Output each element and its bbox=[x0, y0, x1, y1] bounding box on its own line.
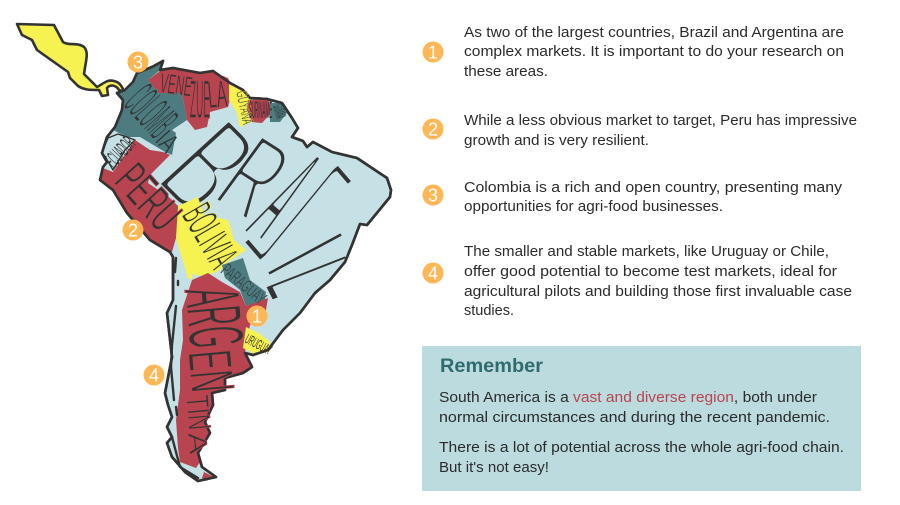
label: ARGENTINA: A bbox=[182, 431, 214, 456]
badge 1 on map bbox=[246, 306, 268, 326]
text 4: offer good potential to become test markets, ideal for bbox=[464, 264, 837, 280]
badge 3 on map bbox=[128, 52, 148, 72]
label: BRAZIL: Z bbox=[208, 134, 388, 292]
map of South America: ECUADOR bbox=[99, 131, 140, 172]
label: ARGENTINA: ARG bbox=[168, 284, 261, 351]
label: BRAZIL: B bbox=[129, 93, 287, 241]
region: Guyana bbox=[229, 84, 252, 127]
item 3 bbox=[422, 180, 843, 215]
region: Peru bbox=[101, 140, 178, 252]
region: Colombia bbox=[113, 62, 187, 155]
region: Central America bbox=[17, 24, 124, 96]
label: BRAZIL: I bbox=[237, 214, 371, 295]
badge 3 on map: 3 bbox=[133, 52, 143, 72]
region: French Guiana bbox=[270, 103, 287, 122]
badge 3 bbox=[422, 184, 444, 206]
text: not easy: But it's not easy! bbox=[439, 460, 549, 476]
text 3: Colombia is a rich and open country, presenting many bbox=[464, 180, 843, 196]
badge 2: 2 bbox=[428, 120, 438, 140]
map of South America: ZUE bbox=[190, 68, 210, 130]
text 4 bbox=[464, 244, 852, 319]
label: BRAZIL: L bbox=[238, 243, 380, 312]
text 3 bbox=[464, 180, 843, 215]
badge 2 bbox=[422, 118, 444, 140]
heading: Remember: Remember bbox=[440, 356, 544, 377]
text 1: these areas. bbox=[464, 64, 548, 80]
item 4 bbox=[422, 244, 852, 319]
label: COLOMBIA: IA bbox=[150, 124, 185, 159]
badge 2 on map bbox=[122, 220, 144, 240]
region: Uruguay bbox=[243, 327, 270, 353]
panel: Remember bbox=[422, 346, 861, 491]
label: COLOMBIA bbox=[113, 74, 188, 159]
map of South America: COLOMB bbox=[113, 74, 188, 149]
region: Argentina bbox=[176, 273, 268, 468]
item 2 bbox=[422, 113, 857, 149]
label: PERU: PERU bbox=[105, 154, 191, 241]
map of South America bbox=[17, 24, 391, 481]
map of South America: URUGUAY bbox=[243, 331, 275, 358]
text 1: As two of the largest countries, Brazil and Argentina are bbox=[464, 25, 844, 41]
label: VENEZUELA bbox=[158, 67, 229, 130]
text 3: opportunities for agri-food businesses. bbox=[464, 199, 723, 215]
region: Bolivia bbox=[176, 197, 246, 280]
badge 4 on map: 4 bbox=[149, 366, 159, 386]
map of South America: GUIANA bbox=[269, 103, 289, 121]
badge 4 bbox=[422, 262, 444, 284]
label: GUYANA: GUYANA bbox=[232, 89, 256, 126]
Chile inner line bbox=[171, 258, 198, 478]
region: continent base (Brazil) bbox=[100, 61, 391, 481]
label: BRAZIL: R bbox=[195, 112, 313, 244]
label: ARGENTINA: EN bbox=[174, 347, 246, 395]
region: Paraguay bbox=[222, 258, 266, 306]
label: PARAGUAY: PARAGUAY bbox=[217, 260, 270, 308]
region: Ecuador bbox=[102, 134, 135, 170]
map of South America: SURINAME bbox=[249, 97, 272, 124]
badge 1 on map: 1 bbox=[252, 306, 262, 326]
label: BRAZIL bbox=[129, 93, 388, 312]
text 1: complex markets. It is important to do your research on bbox=[464, 44, 844, 60]
text 1 bbox=[464, 25, 844, 80]
map of South America: LA bbox=[206, 73, 229, 117]
text 2: While a less obvious market to target, Peru has impressive bbox=[464, 113, 857, 129]
badge 1: 1 bbox=[428, 42, 438, 62]
badge 2 on map: 2 bbox=[128, 220, 138, 240]
map of South America: BOLIVIA bbox=[172, 196, 247, 277]
text 4: agricultural pilots and building those first invaluable case bbox=[464, 284, 852, 300]
badge 1 bbox=[422, 42, 444, 62]
label: VENEZUELA: VENE bbox=[158, 67, 194, 102]
text 2 bbox=[464, 113, 857, 149]
badge 4: 4 bbox=[428, 264, 438, 284]
item 1 bbox=[422, 25, 844, 80]
continent outline bbox=[100, 61, 391, 481]
text 4: studies. bbox=[464, 303, 514, 319]
text: vast and diverse region: South America is a vast and diverse region , both under bbox=[439, 390, 817, 406]
text 2: growth and is very resilient. bbox=[464, 133, 649, 149]
region: Venezuela bbox=[148, 69, 233, 130]
badge 3: 3 bbox=[428, 186, 438, 206]
label: BRAZIL: A bbox=[222, 123, 349, 270]
text: normal circumstances: normal circumstances and during the recent pandemic. bbox=[439, 410, 830, 426]
label: ARGENTINA: TIN bbox=[179, 393, 218, 431]
region: Suriname bbox=[247, 99, 272, 123]
badge 4 on map bbox=[144, 364, 164, 386]
text: potential: There is a lot of potential across the whole agri-food chain. bbox=[439, 440, 844, 456]
text 4: The smaller and stable markets, like Uruguay or Chile, bbox=[464, 244, 829, 260]
